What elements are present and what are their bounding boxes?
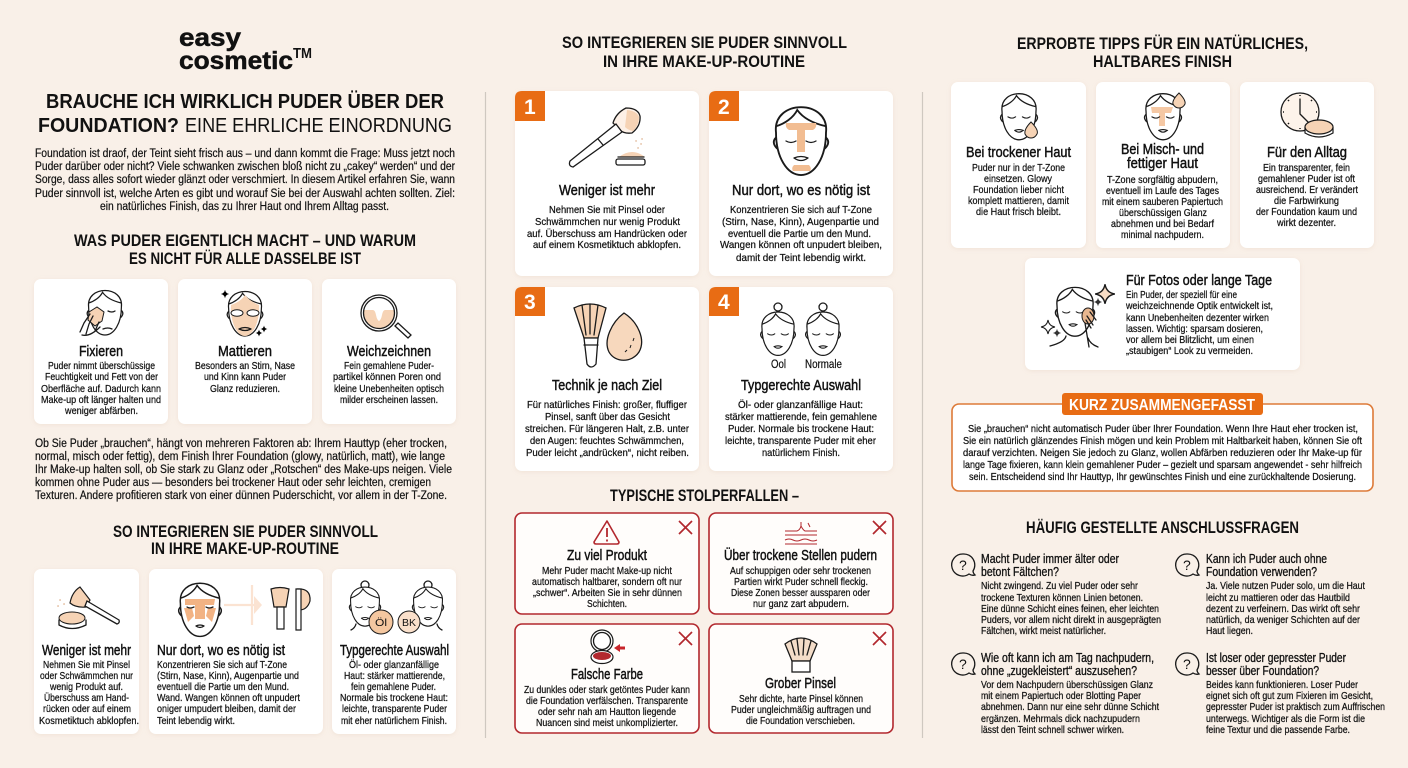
panel: zu viel produkt: automatisch haltbarer, sondern oft nur (532, 576, 682, 588)
panel: mischhaut: eventuell im Laufe des Tages (1106, 185, 1219, 197)
panel: alltag (1240, 82, 1374, 248)
title: BRAUCHE ICH WIRKLICH PUDER ÜBER DER (46, 90, 445, 113)
faq 4: feine Textur und die passende Farbe. (1206, 724, 1350, 736)
panel: schritt 2: eventuell die Partie um den Mund. (728, 228, 871, 240)
icon: question bubble (952, 554, 975, 576)
panel: kurz zusammengefasst: sein. Entscheidend sind Ihr Hauttyp, Ihr gewünschtes Finish und eine zurückhaltende Dosierung. (969, 471, 1356, 483)
icon: two skin types (761, 303, 840, 355)
faq 4: besser über Foundation? (1206, 664, 1319, 678)
faq 3: ohne „zugekleistert“ auszusehen? (981, 664, 1137, 678)
panel: weichzeichnen: partikel können Poren ond (333, 371, 441, 383)
faq 4: Ist loser oder gepresster Puder (1206, 651, 1346, 665)
panel: trockene haut: einsetzen. Glowy (984, 173, 1053, 185)
faq 4: Beides kann funktionieren. Loser Puder (1206, 679, 1358, 691)
panel: schritt 1: auf. Überschuss am Handrücken oder (527, 228, 687, 240)
logo: cosmetic (179, 47, 293, 75)
panel: alltag: ausreichend. Er verändert (1256, 184, 1358, 196)
intro paragraph: Foundation ist draof, der Teint sieht frisch aus – und dann kommt die Frage: Muss jetzt noch (35, 148, 455, 160)
panel: schritt 4: stärker mattierende, fein gemahlene (725, 411, 877, 423)
panel: nur dort (links) (149, 569, 323, 734)
panel: weichzeichnen: Weichzeichnen (347, 344, 431, 360)
paragraph: faktoren: kommen ohne Puder aus — besonders bei trockener Haut oder sehr leichten, cremigen (35, 477, 431, 489)
panel: fotos: lassen. Wichtig: sparsam dosieren, (1126, 323, 1263, 335)
panel: nur dort (links): Nur dort, wo es nötig ist (157, 643, 285, 659)
panel: weichzeichnen: milder erscheinen lassen. (340, 394, 438, 406)
panel: fotos: weichzeichnende Optik entwickelt ist, (1125, 300, 1273, 312)
panel: weniger ist mehr (links): Überschuss am Hand- (44, 692, 129, 704)
panel: mattieren: Mattieren (218, 344, 272, 360)
panel: kurz zusammengefasst (952, 393, 1373, 491)
panel: fotos: vor allem bei Blitzlicht, um einen (1126, 334, 1254, 346)
icon: question bubble: ? (1183, 656, 1191, 672)
panel: fixieren (34, 279, 168, 424)
panel: typgerechte auswahl (links): Haut: stärker mattierende, (344, 670, 445, 682)
panel: mischhaut: T-Zone sorgfältig abpudern, (1107, 174, 1218, 186)
badge 4 (709, 287, 739, 316)
intro paragraph: Puder darüber oder nicht? Viele schwanken zwischen bloß nicht zu „cakey“ werden“ und der (35, 161, 455, 173)
panel: schritt 3: Für natürliches Finish: großer, fluffiger (527, 399, 687, 411)
panel: trockene stellen: Partien wirkt Puder schnell fleckig. (734, 576, 868, 588)
panel: trockene stellen: Diese Zonen besser aussparen oder (731, 587, 870, 599)
panel: trockene haut (951, 82, 1086, 248)
icon: magnifier (361, 295, 411, 338)
heading: so integrieren (mitte): IN IHRE MAKE-UP-ROUTINE (603, 53, 805, 71)
heading: was puder macht: ES NICHT FÜR ALLE DASSELBE IST (129, 249, 361, 268)
icon: warning triangle (594, 521, 619, 544)
panel: kurz zusammengefasst: Sie „brauchen“ nicht automatisch Puder über Ihrer Foundation. Wenn Ihre Haut eher trocken ist, (968, 423, 1358, 435)
panel: mattieren (178, 279, 312, 424)
faq 1: betont Fältchen? (981, 565, 1059, 579)
icon: red compact (591, 630, 625, 664)
panel: falsche farbe: Zu dunkles oder stark getöntes Puder kann (524, 684, 690, 696)
panel: typgerechte auswahl (links) (332, 569, 456, 734)
badge 4: 4 (718, 291, 730, 314)
panel: fotos: „staubigen“ Look zu vermeiden. (1126, 345, 1253, 357)
panel: kurz zusammengefasst: darauf verzichten. Neigen Sie jedoch zu Glanz, wollen Abfärben reduzieren oder Ihr Make-up für (963, 447, 1362, 459)
panel: falsche farbe (515, 624, 699, 733)
panel: schritt 3: den Augen: feuchtes Schwämmchen, (530, 435, 684, 447)
panel: zu viel produkt: „schwer“. Arbeiten Sie in sehr dünnen (533, 587, 682, 599)
panel: mischhaut: mit einem sauberen Papiertuch (1102, 196, 1223, 208)
panel: typgerechte auswahl (links): mit eher natürlichem Finish. (341, 715, 447, 727)
panel: nur dort (links): eventuell die Partie um den Mund. (157, 681, 289, 693)
panel: mattieren: und Kinn kann Puder (204, 371, 286, 383)
panel: schritt 3: streichen. Für längeren Halt, z.B. unter (525, 423, 689, 435)
panel: trockene haut: die Haut frisch bleibt. (976, 206, 1061, 218)
icon: face with t-zone and drop (1144, 93, 1185, 140)
faq 1: Nicht zwingend. Zu viel Puder oder sehr (981, 580, 1138, 592)
panel: mischhaut: Bei Misch- und (1121, 142, 1204, 158)
icon: question bubble (1176, 653, 1199, 675)
panel: schritt 2: Nur dort, wo es nötig ist (732, 183, 870, 199)
intro paragraph: Sorge, dass alles sofort wieder glänzt oder verschmiert. In diesem Artikel erfahren Sie, wann (35, 174, 455, 186)
icon: two faces with powders: Öl (375, 617, 387, 629)
panel: schritt 4 (709, 287, 893, 471)
panel: schritt 4: Ool (771, 359, 786, 371)
panel: typgerechte auswahl (links): leichte, transparente Puder (342, 703, 447, 715)
panel: weichzeichnen: kleine Unebenheiten optisch (334, 383, 444, 395)
panel: schritt 2 (709, 91, 893, 276)
paragraph: faktoren (35, 438, 452, 502)
panel: schritt 4: Normale (805, 359, 842, 371)
icon: coarse brush (785, 638, 817, 672)
panel: nur dort (links): Konzentrieren Sie sich auf T-Zone (157, 659, 287, 671)
faq 4: eignet sich oft gut zum Fixieren im Gesicht, (1206, 690, 1373, 702)
badge 2: 2 (718, 96, 730, 119)
faq 3: Wie oft kann ich am Tag nachpudern, (981, 651, 1154, 665)
panel: nur dort (links): Teint lebendig wirkt. (157, 715, 235, 727)
icon: x mark (679, 521, 692, 534)
panel: grober pinsel: Sehr dichte, harte Pinsel können (739, 693, 863, 705)
panel: fixieren: Fixieren (79, 344, 123, 360)
badge 1: 1 (524, 96, 536, 119)
badge: kurz zusammengefasst (1062, 393, 1263, 415)
icon: question bubble (952, 653, 975, 675)
logo: TM (293, 45, 312, 62)
panel: schritt 3 (515, 287, 699, 471)
panel: trockene stellen: nur ganz zart abpudern. (753, 598, 849, 610)
panel: zu viel produkt (515, 513, 699, 614)
faq 1 (952, 552, 1161, 637)
badge: kurz zusammengefasst: KURZ ZUSAMMENGEFASST (1069, 397, 1255, 414)
logo: easy (179, 24, 241, 52)
panel: fotos: Für Fotos oder lange Tage (1126, 273, 1272, 289)
panel: weniger ist mehr (links) (34, 569, 139, 734)
panel: trockene haut: Foundation lieber nicht (973, 184, 1064, 196)
faq 1: trockene Texturen können Linien betonen. (981, 592, 1143, 604)
panel: fixieren: Oberfläche auf. Dadurch kann (41, 383, 161, 395)
panel: weniger ist mehr (links): rücken oder auf einem (43, 703, 131, 715)
panel: kurz zusammengefasst: Sie ein natürlich glänzendes Finish mögen und kein Problem mit Haltbarkeit haben, können Sie oft (963, 435, 1362, 447)
paragraph: faktoren: Texturen. Andere profitieren stark von einer dünnen Puderschicht, vor allem in der T-Zone. (35, 490, 447, 502)
faq 2 (1176, 552, 1365, 637)
panel: trockene haut: Puder nur in der T-Zone (972, 162, 1065, 174)
panel: schritt 1: auf einem Kosmetiktuch abklopfen. (533, 239, 681, 251)
panel: schritt 2: Wangen können oft unpudert bleiben, (720, 239, 882, 251)
heading: was puder macht: WAS PUDER EIGENTLICH MACHT – UND WARUM (74, 232, 416, 250)
heading: erprobte tipps: HALTBARES FINISH (1093, 53, 1232, 71)
heading: so integrieren (links): SO INTEGRIEREN SIE PUDER SINNVOLL (113, 523, 378, 541)
panel: zu viel produkt: Schichten. (587, 598, 627, 610)
icon: two faces with powders: BK (402, 618, 416, 629)
panel: schritt 4: leichte, transparente Puder mit eher (725, 435, 876, 447)
badge 3: 3 (524, 291, 536, 314)
faq 2: Kann ich Puder auch ohne (1206, 552, 1327, 566)
panel: falsche farbe: Falsche Farbe (571, 667, 643, 683)
faq 4 (1176, 651, 1385, 736)
panel: mattieren: Besonders an Stirn, Nase (195, 360, 295, 372)
panel: schritt 1 (515, 91, 699, 276)
faq 3: ergänzen. Mehrmals dick nachzupudern (981, 713, 1140, 725)
panel: alltag: die Farbwirkung (1274, 195, 1339, 207)
icon: brush and powder (58, 587, 119, 628)
panel: typgerechte auswahl (links): Typgerechte Auswahl (340, 643, 449, 659)
panel: weniger ist mehr (links): Weniger ist mehr (42, 643, 131, 659)
faq 2: Ja. Viele nutzen Puder solo, um die Haut (1206, 580, 1365, 592)
panel: trockene haut: komplett mattieren, damit (968, 195, 1069, 207)
panel: weniger ist mehr (links): Kosmetiktuch abklopfen. (39, 715, 139, 727)
panel: nur dort (links): oniger umpudert bleiben, damit der (157, 703, 296, 715)
panel: alltag: wirkt dezenter. (1276, 217, 1336, 229)
intro paragraph: ein natürliches Finish, das zu Ihrer Haut ond Ihrem Alltag passt. (100, 201, 389, 213)
panel: grober pinsel: Puder ungleichmäßig auftragen und (731, 704, 871, 716)
panel: schritt 4: Typgerechte Auswahl (741, 378, 861, 394)
panel: mischhaut: minimal nachpudern. (1121, 229, 1204, 241)
panel: nur dort (links): (Stirn, Nase, Kinn), Augenpartie und (157, 670, 299, 682)
faq 1: Puders, vor allem nicht direkt in ausgeprägten (981, 614, 1161, 626)
icon: brush and sponge (574, 304, 642, 367)
panel: weichzeichnen (322, 279, 456, 424)
title (38, 90, 452, 137)
panel: falsche farbe: Nuancen sind meist unkomplizierter. (536, 717, 678, 729)
icon: brush over compact (569, 108, 645, 167)
panel: alltag: Ein transparenter, fein (1263, 162, 1350, 174)
panel: fixieren: weniger abfärben. (64, 405, 138, 417)
paragraph: faktoren: normal, misch oder fettig), dem Finish Ihrer Foundation (glowy, natürlich, matt), wie lange (35, 451, 445, 463)
heading: erprobte tipps (1017, 34, 1308, 71)
icon: question bubble: ? (1183, 557, 1191, 573)
faq 3: Vor dem Nachpudern überschüssigen Glanz (981, 679, 1153, 691)
panel: fotos (1025, 258, 1300, 370)
panel: weniger ist mehr (links): wenig Produkt auf. (49, 681, 123, 693)
panel: schritt 1: Weniger ist mehr (559, 183, 655, 199)
heading: so integrieren (mitte) (562, 34, 847, 71)
faq 3: lässt den Teint schnell schwer wirken. (981, 724, 1124, 736)
intro paragraph: Puder sinnvoll ist, welche Arten es gibt und worauf Sie bei der Auswahl achten sollten. Ziel: (35, 188, 455, 200)
panel: mischhaut (1096, 82, 1230, 248)
panel: schritt 1: Nehmen Sie mit Pinsel oder (549, 204, 665, 216)
panel: weichzeichnen: Fein gemahlene Puder- (344, 360, 434, 372)
title: FOUNDATION? (38, 115, 179, 137)
faq 2: dezent zu verfeinern. Das wirkt oft sehr (1206, 603, 1360, 615)
icon: face, arrow and tools (179, 583, 310, 636)
intro paragraph (35, 148, 455, 213)
faq 3 (952, 651, 1159, 736)
panel: mischhaut: fettiger Haut (1127, 156, 1198, 172)
icon: matte face (221, 290, 268, 336)
heading: stolperfallen: TYPISCHE STOLPERFALLEN – (610, 487, 799, 505)
paragraph: faktoren: Ihr Make-up halten soll, ob Sie stark zu Glanz oder „Rotschen“ des Make-ups neigen. Viele (35, 464, 452, 476)
panel: falsche farbe: oder sehr nah am Hautton liegende (538, 706, 676, 718)
heading: so integrieren (mitte): SO INTEGRIEREN SIE PUDER SINNVOLL (562, 34, 847, 52)
panel: falsche farbe: die Foundation verfälschen. Transparente (526, 695, 688, 707)
panel: schritt 4: Öl- oder glanzanfällige Haut: (738, 399, 863, 411)
faq 1: Macht Puder immer älter oder (981, 552, 1119, 566)
panel: trockene haut: Bei trockener Haut (966, 145, 1071, 161)
icon: skin layers (785, 522, 817, 544)
panel: schritt 3: Pinsel, sanft über das Gesicht (545, 411, 670, 423)
heading: erprobte tipps: ERPROBTE TIPPS FÜR EIN NATÜRLICHES, (1017, 34, 1308, 53)
panel: schritt 2: damit der Teint lebendig wirkt. (736, 252, 866, 264)
faq 3: mit einem Papiertuch oder Blotting Paper (981, 690, 1141, 702)
panel: schritt 2: Konzentrieren Sie sich auf T-Zone (730, 204, 872, 216)
panel: weniger ist mehr (links): Nehmen Sie mit Pinsel (43, 659, 130, 671)
panel: weniger ist mehr (links): oder Schwämmchen nur (40, 670, 133, 682)
icon: clock and compact (1281, 93, 1333, 137)
faq 4: unterwegs. Wichtiger als die Form ist die (1206, 713, 1365, 725)
icon: face with sponge (80, 290, 123, 335)
faq 1: Fältchen, wirkt meist natürlicher. (981, 625, 1106, 637)
panel: typgerechte auswahl (links): Öl- oder glanzanfällige (349, 659, 439, 671)
icon: face with drop (1000, 94, 1038, 140)
faq 2: Haut liegen. (1206, 625, 1253, 637)
panel: trockene stellen: Über trockene Stellen pudern (724, 546, 877, 564)
badge 3 (515, 287, 545, 316)
badge 1 (515, 91, 545, 121)
panel: trockene stellen (709, 513, 893, 614)
panel: schritt 3: Puder leicht „andrücken“, nicht reiben. (526, 447, 689, 459)
panel: typgerechte auswahl (links): fein gemahlene Puder. (351, 681, 436, 693)
panel: grober pinsel (709, 624, 893, 733)
faq 2: natürlich, da weniger Schichten auf der (1206, 614, 1360, 626)
panel: schritt 4: natürlichem Finish. (762, 447, 840, 459)
icon: face with t-zone (774, 107, 828, 175)
icon: question bubble: ? (959, 656, 967, 672)
panel: fotos: kann Unebenheiten dezenter wirken (1126, 312, 1269, 324)
panel: schritt 4: Puder. Normale bis trockene Haut: (728, 423, 874, 435)
panel: grober pinsel: die Foundation verschieben. (746, 715, 855, 727)
heading: was puder macht (74, 232, 416, 268)
badge 2 (709, 91, 739, 121)
icon: question bubble (1176, 554, 1199, 576)
faq 1: Eine dünne Schicht eines feinen, eher leichten (981, 603, 1159, 615)
panel: fotos: Ein Puder, der speziell für eine (1126, 289, 1237, 301)
panel: alltag: der Foundation kaum und (1256, 206, 1357, 218)
panel: mischhaut: abnehmen und bei Bedarf (1111, 218, 1214, 230)
faq 2: leicht zu mattieren oder das Hautbild (1206, 592, 1350, 604)
faq 3: abnehmen. Dann nur eine sehr dünne Schicht (981, 701, 1159, 713)
title: EINE EHRLICHE EINORDNUNG (185, 115, 452, 137)
panel: mattieren: Glanz reduzieren. (210, 383, 280, 395)
panel: zu viel produkt: Zu viel Produkt (567, 548, 647, 564)
panel: nur dort (links): Wand. Wangen können oft unpudert (157, 692, 300, 704)
paragraph: faktoren: Ob Sie Puder „brauchen“, hängt von mehreren Faktoren ab: Ihrem Hauttyp (eher trocken, (35, 438, 447, 450)
icon: question bubble: ? (959, 557, 967, 573)
panel: schritt 2: (Stirn, Nase, Kinn), Augenpartie und (722, 216, 879, 228)
panel: mischhaut: überschüssigen Glanz (1119, 207, 1207, 219)
heading: so integrieren (links) (113, 523, 378, 558)
panel: alltag: gemahlener Puder ist oft (1258, 173, 1355, 185)
faq 2: Foundation verwenden? (1206, 565, 1317, 579)
panel: typgerechte auswahl (links): Normale bis trockene Haut: (340, 692, 448, 704)
panel: trockene stellen: Auf schuppigen oder sehr trockenen (730, 565, 871, 577)
icon: two faces with powders (349, 581, 444, 634)
heading: so integrieren (links): IN IHRE MAKE-UP-ROUTINE (151, 540, 339, 558)
panel: schritt 1: Schwämmchen nur wenig Produkt (535, 216, 680, 228)
panel: fixieren: Puder nimmt überschüssige (48, 360, 155, 372)
icon: woman with sparkles (1041, 284, 1115, 347)
panel: fixieren: Make-up oft länger halten und (41, 394, 161, 406)
panel: grober pinsel: Grober Pinsel (765, 676, 836, 692)
panel: fixieren: Feuchtigkeit und Fett von der (45, 371, 158, 383)
panel: alltag: Für den Alltag (1267, 145, 1347, 161)
panel: zu viel produkt: Mehr Puder macht Make-up nicht (542, 565, 672, 577)
logo (179, 24, 312, 75)
panel: schritt 3: Technik je nach Ziel (552, 378, 662, 394)
heading: faq: HÄUFIG GESTELLTE ANSCHLUSSFRAGEN (1026, 519, 1299, 537)
